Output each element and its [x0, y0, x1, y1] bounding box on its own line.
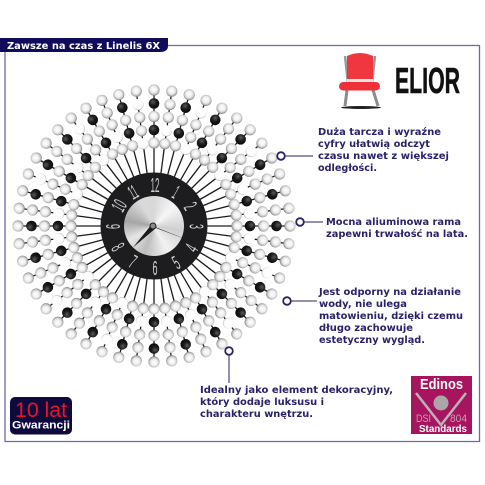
wall clock	[12, 84, 296, 368]
clock numerals: 4	[182, 241, 203, 256]
header bar: Zawsze na czas z Linelis 6X	[7, 41, 160, 52]
badge: 10 lat gwarancji: 10 lat	[15, 399, 67, 422]
clock hands	[133, 223, 197, 248]
badge: 10 lat gwarancji	[10, 397, 72, 434]
badge: Edinos standards	[411, 376, 472, 435]
black dial	[100, 172, 208, 280]
dial text: czasu nawet z większej	[318, 151, 449, 162]
clock numerals: 6	[152, 258, 158, 280]
badge: 10 lat gwarancji: Gwarancji	[12, 420, 70, 432]
clock numerals: 5	[169, 253, 184, 274]
logo: Elior	[339, 53, 460, 109]
clock numerals: 11	[125, 181, 142, 204]
water resistance text: matowieniu, dzięki czemu	[319, 311, 463, 322]
dial text: cyfry ułatwią odczyt	[318, 139, 430, 150]
badge: Edinos standards: DSI	[416, 413, 431, 425]
marker	[277, 152, 313, 160]
frame text: zapewni trwałość na lata.	[326, 228, 468, 240]
clock numerals: 3	[184, 224, 206, 229]
beaded sunburst spokes	[12, 84, 296, 368]
badge: Edinos standards: Standards	[419, 424, 467, 435]
callout: decoration	[200, 347, 393, 420]
badge: Edinos standards: 804	[450, 413, 467, 425]
water resistance text: Jest odporny na działanie	[318, 287, 461, 298]
clock numerals: 10	[108, 196, 132, 216]
clock numerals: 8	[106, 240, 128, 255]
dial text: odległości.	[318, 162, 377, 174]
clock numerals	[101, 175, 206, 280]
dial text	[318, 126, 449, 174]
badge: Edinos standards: Edinos	[420, 376, 463, 393]
clock numerals: 9	[101, 224, 123, 229]
clock numerals: 7	[125, 252, 140, 273]
frame outline	[5, 46, 480, 442]
clock numerals: 12	[150, 175, 160, 197]
water resistance text	[318, 287, 463, 346]
water resistance text: długo zachowuje	[319, 323, 413, 334]
clock numerals: 2	[179, 199, 200, 214]
clock numerals: 1	[168, 182, 183, 203]
water resistance text: estetyczny wygląd.	[319, 335, 425, 346]
decoration text: który dodaje luksusu i	[200, 396, 324, 408]
decoration text	[200, 385, 393, 420]
callout: dial	[277, 126, 449, 174]
callout: frame	[296, 217, 468, 240]
frame text: Mocna aliuminowa rama	[326, 217, 461, 228]
silver centre disc	[124, 196, 184, 256]
marker	[296, 218, 323, 226]
decoration text: charakteru wnętrzu.	[200, 409, 313, 420]
callout: water resistance	[283, 287, 463, 346]
marker	[225, 347, 233, 383]
marker	[283, 297, 317, 305]
icon: red chair	[339, 53, 381, 109]
frame text	[326, 217, 468, 240]
decoration text: Idealny jako element dekoracyjny,	[200, 385, 393, 396]
dial text: Duża tarcza i wyraźne	[318, 126, 441, 138]
water resistance text: wody, nie ulega	[319, 299, 407, 310]
